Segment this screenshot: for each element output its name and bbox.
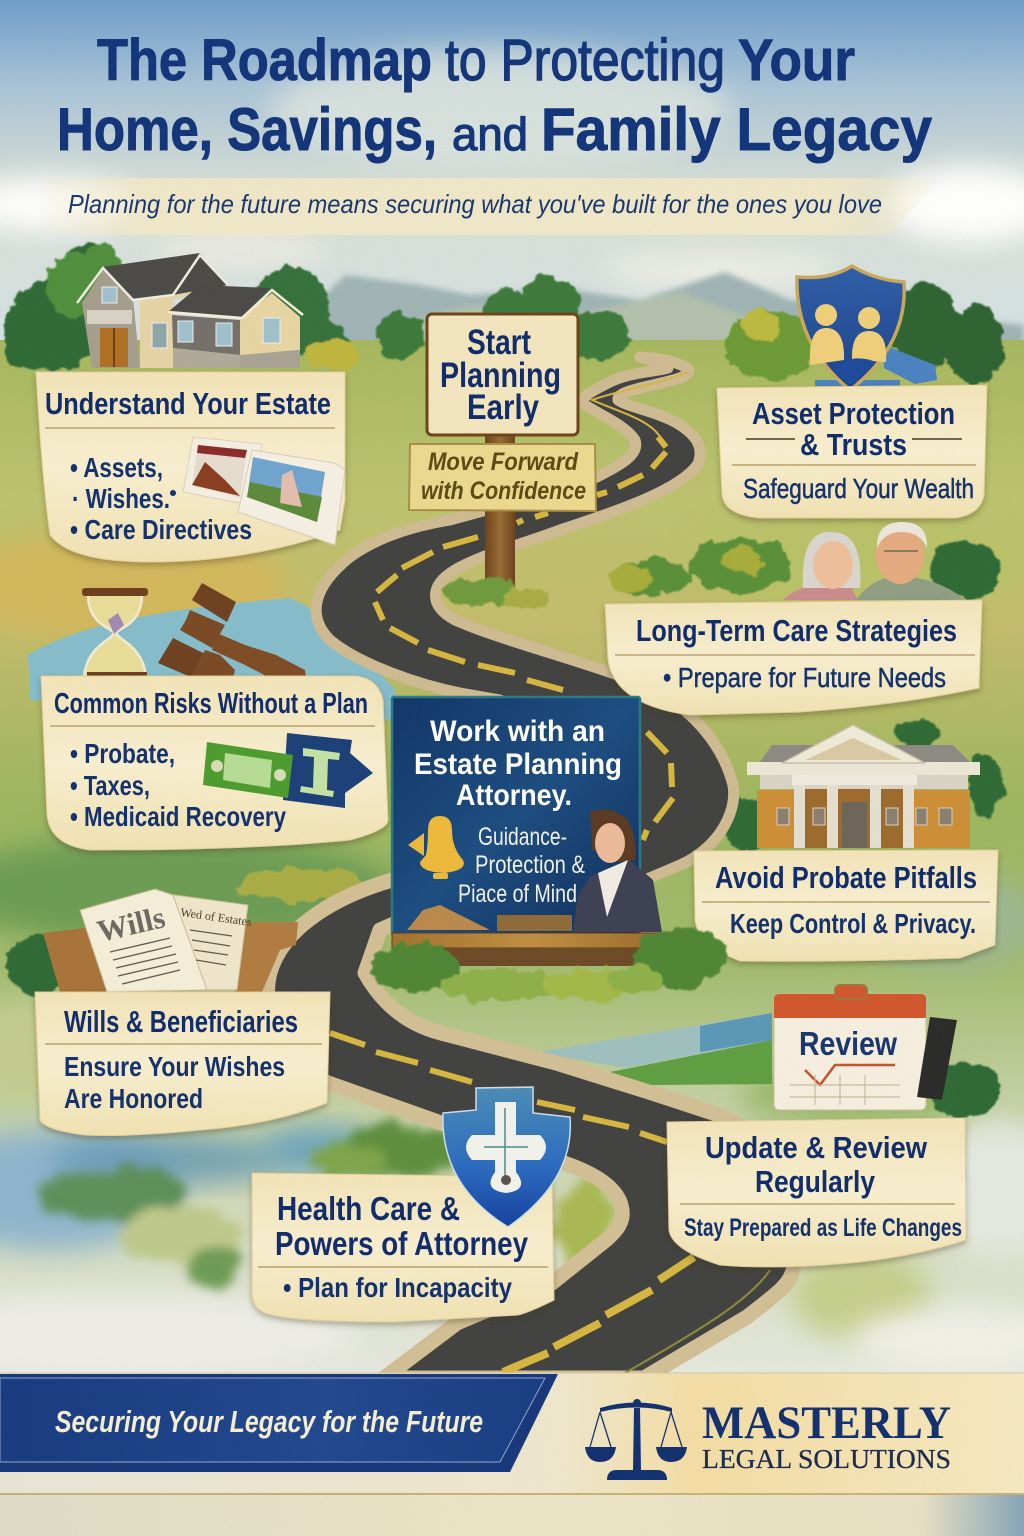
icon: family shield — [797, 266, 937, 390]
heading: understand your estate: Understand Your Estate — [45, 386, 331, 421]
text: guidance: Piace of Mind — [458, 880, 577, 908]
text: prepare for future: • Prepare for Future Needs — [663, 662, 946, 693]
title: The Roadmap — [97, 28, 432, 93]
icon: wills documents: Wills — [94, 899, 168, 949]
list: risks: • Taxes, — [70, 770, 150, 801]
sign: start planning early — [427, 314, 578, 435]
icon: courthouse — [747, 725, 980, 848]
text: guidance: Guidance- — [478, 823, 567, 851]
title: Family Legacy — [541, 96, 933, 163]
title: to Protecting — [445, 28, 725, 93]
title: Home, Savings, — [57, 96, 437, 163]
landscape fields — [0, 340, 1024, 1380]
icon: photographs — [183, 437, 345, 545]
stream — [537, 1013, 772, 1085]
panel: health care — [252, 1173, 554, 1322]
panel: attorney board — [392, 697, 673, 966]
panel: understand your estate — [36, 372, 345, 562]
icon: wills documents: Wed of Estates — [180, 905, 253, 929]
banner: securing your legacy — [0, 1374, 558, 1472]
road upper section — [316, 357, 734, 882]
heading: long-term care: Long-Term Care Strategies — [636, 613, 957, 648]
panel: asset protection — [717, 385, 987, 518]
background sky — [0, 0, 1024, 345]
green patches — [40, 1124, 615, 1287]
logo: masterly legal solutions — [585, 1397, 951, 1480]
heading: work with an attorney — [414, 715, 622, 812]
icon: medical shield — [443, 1087, 570, 1227]
sign: move forward — [409, 444, 596, 511]
sign: start planning early: Planning — [440, 356, 561, 395]
heading: common risks: Common Risks Without a Plan — [54, 688, 368, 720]
sign: move forward: Move Forward — [428, 448, 579, 476]
icon: gavel — [158, 583, 306, 678]
title — [57, 28, 933, 163]
text: honor wishes — [64, 1051, 285, 1114]
icon: review calendar: Review — [799, 1025, 897, 1062]
panel: update and review — [667, 1118, 966, 1267]
panel: common risks — [41, 676, 388, 850]
text: guidance: Protection & — [475, 851, 585, 879]
subtitle ribbon: Planning for the future means securing what you've built for the ones you love — [68, 189, 882, 219]
desk — [392, 933, 673, 948]
text: honor wishes: Are Honored — [64, 1083, 203, 1114]
list: risks: • Probate, — [70, 738, 175, 769]
heading: work with an attorney: Attorney. — [456, 779, 572, 812]
logo: masterly legal solutions: LEGAL SOLUTIONS — [702, 1444, 951, 1474]
list: risks: • Medicaid Recovery — [70, 801, 286, 832]
icon: elderly couple — [783, 522, 965, 600]
icon: scales — [585, 1399, 687, 1480]
tree clusters — [4, 242, 1005, 1118]
panel: avoid probate — [694, 850, 998, 961]
heading: asset protection — [752, 396, 955, 462]
text: plan for incapacity: • Plan for Incapacity — [283, 1272, 512, 1303]
signpost — [409, 314, 596, 608]
heading: health care: Health Care & — [277, 1190, 460, 1227]
icon: review calendar — [774, 985, 957, 1110]
heading: update and review: Update & Review — [705, 1130, 928, 1165]
heading: work with an attorney: Work with an — [430, 715, 605, 748]
list: risks — [70, 738, 286, 832]
lane markings — [330, 372, 770, 1373]
subtitle ribbon — [40, 178, 940, 235]
list: estate items — [70, 452, 252, 545]
logo: masterly legal solutions: MASTERLY — [702, 1397, 951, 1449]
distant mountains — [300, 272, 1024, 380]
banner: securing your legacy: Securing Your Legacy for the Future — [55, 1404, 483, 1439]
icon: tax tag and arrow — [203, 733, 373, 808]
road lower section — [267, 878, 797, 1378]
title: and — [452, 108, 528, 160]
winding road — [267, 357, 797, 1378]
heading: update and review — [705, 1130, 928, 1199]
heading: health care: Powers of Attorney — [275, 1225, 529, 1262]
list: estate items: · Wishes. — [72, 483, 170, 514]
attorney figure — [573, 810, 662, 932]
pond — [28, 598, 395, 720]
icon: hourglass — [82, 588, 148, 678]
icon: house — [77, 253, 303, 368]
heading: wills and beneficiaries: Wills & Beneficiaries — [64, 1004, 298, 1039]
heading: health care — [275, 1190, 529, 1262]
icon: wills documents — [43, 889, 298, 992]
panel: long-term care — [605, 600, 982, 715]
heading: work with an attorney: Estate Planning — [414, 748, 622, 781]
heading: update and review: Regularly — [755, 1164, 876, 1199]
title: Your — [738, 28, 855, 93]
bottom strip — [0, 1373, 1024, 1536]
list: estate items: • Assets, — [70, 452, 163, 483]
icon: books and rocks — [407, 905, 572, 931]
sign: move forward: with Confidence — [421, 477, 586, 505]
text: guidance — [458, 823, 585, 908]
sign: start planning early: Start — [467, 323, 531, 362]
panel: wills and beneficiaries — [35, 992, 330, 1135]
list: estate items: • Care Directives — [70, 514, 252, 545]
icon: bell — [408, 816, 464, 879]
bushes under board — [370, 928, 726, 1001]
heading: asset protection: Asset Protection — [752, 396, 955, 431]
sign: start planning early: Early — [467, 388, 539, 427]
heading: asset protection: & Trusts — [800, 427, 907, 462]
text: honor wishes: Ensure Your Wishes — [64, 1051, 285, 1082]
text: safeguard your wealth: Safeguard Your Wealth — [743, 473, 974, 504]
